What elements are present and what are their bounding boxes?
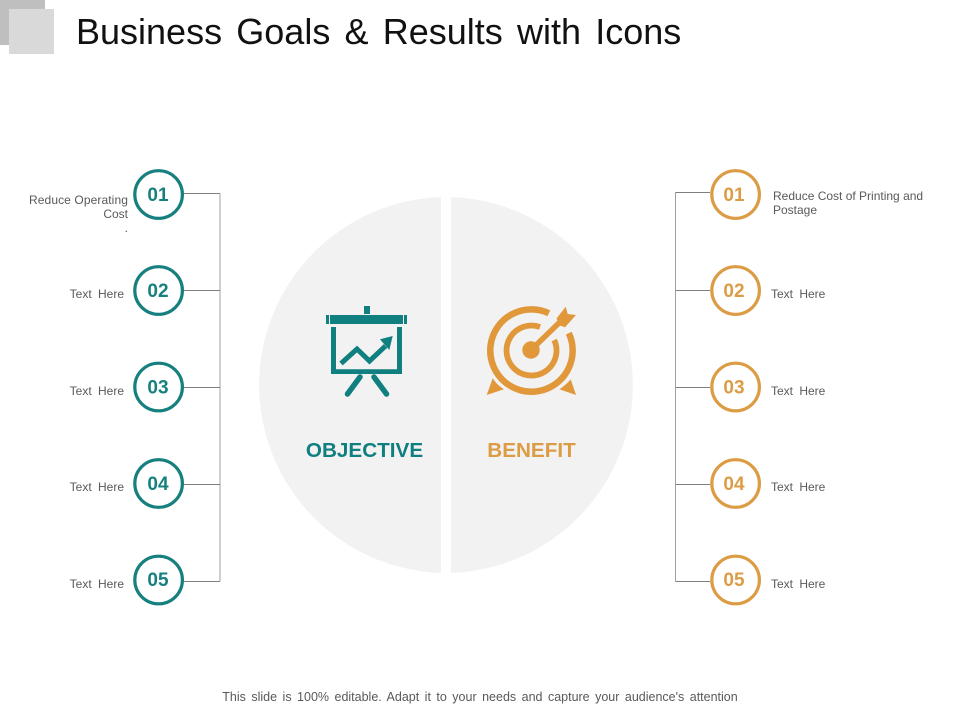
benefit item 01: 01	[723, 185, 745, 206]
objective item 01: Cost	[103, 207, 129, 221]
benefit item 01	[712, 171, 923, 218]
objective item 01: 01	[147, 185, 169, 206]
icon: presentation board	[326, 306, 407, 394]
objective item 05: Text Here	[70, 577, 124, 591]
objective item 01: Reduce Operating	[29, 193, 128, 207]
objective item 04: Text Here	[70, 480, 124, 494]
benefit item 01: Reduce Cost of Printing and	[773, 189, 923, 203]
benefit item 03	[712, 363, 826, 411]
objective item 01	[29, 171, 182, 235]
label: objective: OBJECTIVE	[306, 439, 423, 462]
title: Business Goals & Results with Icons	[76, 11, 681, 52]
objective item 02	[70, 267, 182, 314]
connector: right bracket	[676, 192, 710, 582]
objective item 03: 03	[147, 378, 169, 398]
objective item 02: Text Here	[70, 287, 124, 301]
objective item 04	[70, 460, 182, 507]
objective item 01: .	[125, 221, 128, 235]
panel: benefit half circle	[451, 197, 633, 573]
decorative corner squares	[0, 0, 54, 54]
objective item 03	[70, 363, 182, 411]
benefit item 02: 02	[723, 281, 745, 302]
benefit item 05: 05	[723, 570, 745, 591]
label: benefit: BENEFIT	[487, 439, 576, 462]
panel: objective half circle	[259, 197, 441, 573]
benefit item 05	[712, 556, 826, 604]
objective item 05: 05	[147, 570, 169, 591]
objective item 05	[70, 556, 182, 604]
benefit item 04: Text Here	[771, 480, 826, 494]
benefit item 03: Text Here	[771, 384, 826, 398]
benefit item 02	[712, 267, 826, 314]
benefit item 01: Postage	[773, 203, 817, 217]
benefit item 05: Text Here	[771, 577, 826, 591]
benefit item 03: 03	[723, 378, 745, 398]
objective item 04: 04	[147, 474, 169, 495]
connector: left bracket	[184, 194, 220, 582]
icon: target with arrow	[487, 307, 576, 395]
objective item 02: 02	[147, 281, 169, 302]
benefit item 04: 04	[723, 474, 745, 495]
benefit item 02: Text Here	[771, 287, 826, 301]
benefit item 04	[712, 460, 826, 507]
footer caption: This slide is 100% editable. Adapt it to your needs and capture your audience's attention	[222, 690, 738, 704]
objective item 03: Text Here	[70, 384, 124, 398]
